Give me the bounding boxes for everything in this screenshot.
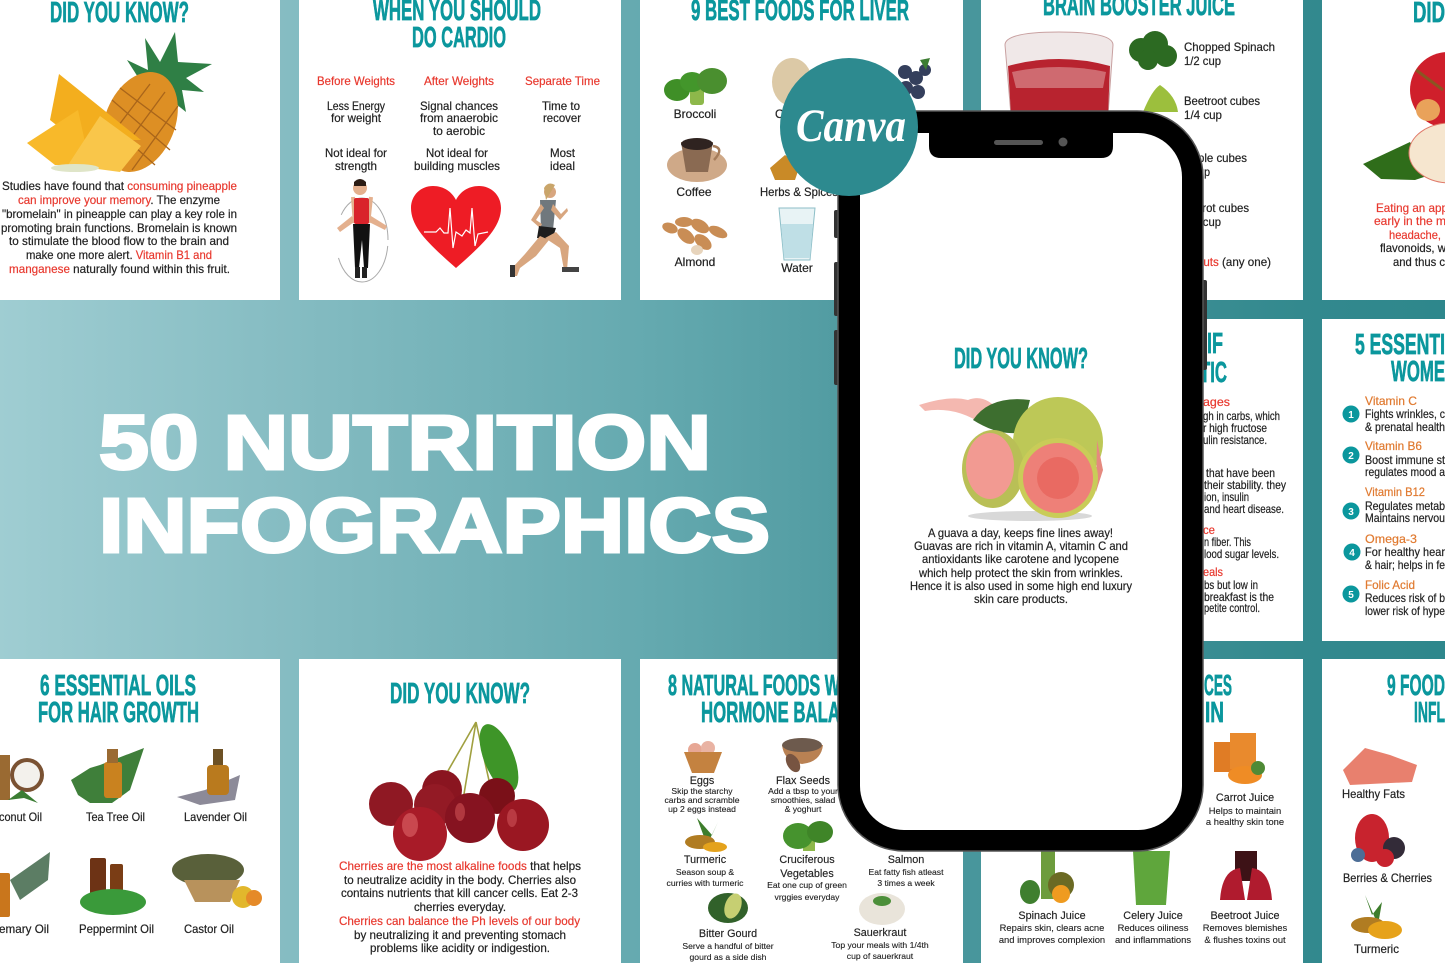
food: eggs: Skip the starchy [671,786,733,796]
text block: foods to avoid: bs but low in [1204,578,1258,592]
food: sauerkraut: Top your meals with 1/4th [831,940,929,950]
heading: 6 essential oils for hair growth: FOR HAIR GROWTH [38,697,199,729]
cardio comparison text: Signal chances [420,99,498,113]
text block: apple facts: early in the m [1374,214,1445,228]
juice: spinach: Repairs skin, clears acne [1000,922,1104,933]
food: salmon: Salmon [888,854,924,866]
heading: when you should do cardio [373,0,541,54]
text block: apple facts: headache, [1389,228,1441,242]
main title: 50 NUTRITION [99,400,711,486]
food: salmon: 3 times a week [877,878,935,888]
cardio comparison text: for weight [331,111,382,125]
cardio comparison text: Most [550,146,576,160]
screen text block: A guava a day, keeps fine lines away! [928,526,1113,540]
icon: tea tree oil [71,748,144,803]
column headings: After Weights [424,74,494,88]
juice: beetroot: Removes blemishes [1203,922,1288,933]
text block: cherries facts: cherries everyday. [414,900,506,914]
food: cruciferous vegetables: vrggies everyday [775,892,840,902]
text block: foods to avoid: gh in carbs, which [1203,409,1280,423]
text block: foods to avoid [1203,395,1286,615]
icon: lavender oil [177,749,240,805]
food: eggs: carbs and scramble [664,795,740,805]
juice: carrot: Carrot Juice [1216,792,1274,804]
food: salmon [868,854,944,888]
label: oils bottom row: emary Oil [0,922,49,936]
panel: when you should do cardio [299,0,621,300]
heading: 6 essential oils for hair growth [38,670,199,729]
food: almond: Almond [675,255,715,269]
number badges: 5 [1348,590,1354,601]
food: sauerkraut: Sauerkraut [854,927,906,939]
heading: juices for skin fragment: IN [1205,697,1224,729]
icon: heart with heartbeat [411,186,501,268]
food: bitter gourd: Serve a handful of bitter [682,941,774,951]
text block: foods to avoid: ion, insulin [1204,490,1249,504]
text block: cherries facts: by neutralizing it and preventing stomach [354,928,566,942]
panel: 9 best foods for liver [640,0,963,300]
text block: cherries facts: Cherries can balance the Ph levels of our body [339,914,580,928]
vitamin list: Omega-3 [1365,532,1417,546]
juice ingredients: 1 cup [1184,165,1210,179]
text block: pineapple facts: promoting brain functions. Bromelain is known [1,221,237,235]
juice: beetroot: Beetroot Juice [1210,910,1280,922]
phone side buttons [834,210,1207,385]
label: oils top row: Tea Tree Oil [86,810,145,824]
label: oils top row: Lavender Oil [184,810,247,824]
heading: did you know: DID YOU KNOW? [390,678,530,710]
juice: carrot: Helps to maintain [1209,805,1281,816]
food: turmeric: curries with turmeric [667,878,744,888]
juice ingredients: Apple cubes [1184,151,1247,165]
cardio comparison text: ideal [550,159,575,173]
food: cruciferous vegetables [767,821,847,902]
panel: apple did you know [1322,0,1445,300]
juice: spinach: Spinach Juice [1018,910,1086,922]
panel: 5 essential vitamins for women [1322,319,1445,641]
text block: foods to avoid: and heart disease. [1204,502,1284,516]
column headings [317,74,600,88]
text block: cherries facts [339,859,581,955]
food: eggs [664,741,740,814]
cardio comparison text: recover [543,111,581,125]
text block: pineapple facts [1,179,237,276]
food: eggs: up 2 eggs instead [668,804,736,814]
heading: 5 essential women [1355,329,1445,388]
text block: pineapple facts: to stimulate the blood flow to the brain and [9,234,229,248]
cardio comparison text: from anaerobic [420,111,498,125]
juice ingredients: Nuts (any one) [1195,255,1271,269]
food: turmeric: Season soup & [676,867,734,877]
cardio comparison text [325,99,581,173]
screen text block: which help protect the skin from wrinkles. [918,566,1123,580]
food: bitter gourd [682,891,774,962]
juice: celery: Celery Juice [1123,910,1183,922]
heading: 9 foods [1387,670,1445,729]
heading: intermittent fasting fragment [1200,328,1227,389]
phone speaker [994,140,1043,145]
heading: 8 natural foods hormone balance: 8 NATURAL FOODS W [668,670,840,702]
text block: foods to avoid: n fiber. This [1204,535,1251,549]
icon: rosemary oil [0,852,50,917]
juice: beetroot: & flushes toxins out [1204,934,1286,945]
food: cruciferous vegetables: Eat one cup of green [767,880,847,890]
label: oils bottom row [0,922,234,936]
cardio comparison text: to aerobic [433,124,485,138]
text block: foods to avoid: petite control. [1204,601,1260,615]
icon: woman with jump rope [336,179,388,282]
heading: 8 natural foods hormone balance [668,670,840,729]
food: bitter gourd: Bitter Gourd [699,928,757,940]
heading: juices for skin fragment [1204,670,1232,729]
juice: spinach: and improves complexion [999,934,1105,945]
icon: peppermint oil [80,858,146,915]
text block: foods to avoid: r high fructose [1203,421,1267,435]
icon: beetroot leaf [1143,85,1178,112]
food: flax seeds [768,738,838,814]
juice: carrot [1206,733,1284,827]
number badges: 3 [1348,507,1354,518]
text block: foods to avoid: eals [1203,565,1223,579]
food: broccoli [664,68,727,121]
juice: celery: and inflammations [1115,934,1191,945]
food: flax seeds: Add a tbsp to your [768,786,838,796]
food: healthy fats: Healthy Fats [1342,787,1405,801]
vitamin list: Folic Acid [1365,578,1415,592]
canva badge: Canva [796,100,906,152]
text block: pineapple facts: Studies have found that consuming pineapple [2,179,237,193]
panel: intermittent fasting foods [981,319,1303,641]
juice: spinach [999,851,1105,945]
food: turmeric: Turmeric [684,854,727,866]
text block: foods to avoid: ages [1203,395,1230,409]
panel: pineapple did you know [0,0,280,300]
heading: 6 essential oils for hair growth: 6 ESSENTIAL OILS [40,670,196,702]
juice ingredients: 1/4 cup [1184,108,1222,122]
number badges: 1 [1348,410,1354,421]
phone mockup [834,111,1207,851]
screen text block: antioxidants like carotene and lycopene [922,552,1119,566]
number badges: 2 [1348,451,1354,462]
food: water: Water [781,261,813,275]
food: cruciferous vegetables: Cruciferous [779,854,835,866]
text block: foods to avoid: ulin resistance. [1203,433,1267,447]
screen text block: Hence it is also used in some high end luxury [910,579,1132,593]
food: water [779,208,815,275]
icon: apple [1363,52,1445,183]
text block: foods to avoid: lood sugar levels. [1204,547,1279,561]
phone screen [860,133,1182,830]
food: bitter gourd: gourd as a side dish [690,952,767,962]
main title: INFOGRAPHICS [99,483,770,569]
juice ingredients: Chopped Spinach [1184,40,1275,54]
food: oats: Oats [775,107,800,121]
column headings: Separate Time [525,74,600,88]
juice ingredients: Beetroot cubes [1184,94,1260,108]
text block: cherries facts: contains nutrients that kill cancer cells. Eat 2-3 [341,886,578,900]
text block: foods to avoid: their stability. they [1204,478,1286,492]
food: sauerkraut [831,893,929,961]
food: herbs and spices: Herbs & Spices [760,185,838,199]
juice ingredients: Carrot cubes [1184,201,1249,215]
panel: 8 natural foods [640,659,963,963]
vitamin list [1365,394,1445,618]
cardio comparison text: Time to [542,99,580,113]
heading: 8 natural foods hormone balance: HORMONE BALA [701,697,840,729]
heading: intermittent fasting fragment: TIC [1200,357,1227,389]
main title [99,400,770,569]
juice: celery: Reduces oiliness [1118,922,1189,933]
screen heading: did you know: DID YOU KNOW? [954,343,1088,375]
food: flax seeds: smoothies, salad [771,795,835,805]
text block: pineapple facts: make one more alert. Vitamin B1 and [26,248,212,262]
label: oils bottom row: Peppermint Oil [79,922,154,936]
food: broccoli: Broccoli [674,107,716,121]
food: turmeric [1351,895,1402,956]
icon: spinach [1129,31,1177,70]
cardio comparison text: building muscles [414,159,500,173]
heading: when you should do cardio: DO CARDIO [412,22,506,54]
text block: pineapple facts: can improve your memory. The enzyme [18,193,220,207]
canva badge [780,58,918,196]
text block: cherries facts: problems like acidity or indigestion. [370,941,550,955]
food: blueberries [898,58,931,99]
food: healthy fats [1342,748,1417,801]
food: oats [772,58,812,121]
text block: pineapple facts: manganese naturally found within this fruit. [9,262,230,276]
screen text block: skin care products. [974,592,1068,606]
phone notch [929,133,1113,158]
icon: cherries [369,719,549,861]
food: turmeric [667,818,744,888]
food: salmon: Eat fatty fish atleast [868,867,944,877]
juice ingredients: 1/4 cup [1184,215,1221,229]
icon: castor oil [172,854,262,908]
juice: carrot: a healthy skin tone [1206,816,1284,827]
column headings: Before Weights [317,74,395,88]
vitamin list: Vitamin B6 [1365,439,1422,453]
icon: guava [919,397,1103,521]
food: cruciferous vegetables: Vegetables [780,868,834,880]
icon: coconut oil [0,755,44,803]
panel: brain booster juice [981,0,1303,300]
text block: cherries facts: to neutralize acidity in the body. Cherries also [344,873,576,887]
vitamin list: Vitamin B12 [1365,485,1425,499]
food: berries and cherries [1343,814,1432,885]
juice: beetroot [1203,851,1288,945]
icon: pineapple [27,32,212,183]
label: oils top row: conut Oil [0,810,42,824]
icon: juice glass [1005,32,1113,115]
number badges: 4 [1349,548,1355,559]
juice: celery [1115,851,1191,945]
cardio comparison text: Less Energy [327,99,385,113]
panel: juices for skin [981,659,1303,963]
food: coffee: Coffee [676,185,712,199]
cardio comparison text: Not ideal for [325,146,387,160]
label: oils bottom row: Castor Oil [184,922,234,936]
text block: apple facts [1374,201,1445,269]
number badges [1342,406,1360,602]
food: coffee [667,138,727,199]
food: flax seeds: Flax Seeds [776,775,831,787]
phone body [838,111,1203,851]
vitamin list: Vitamin C [1365,394,1417,408]
panel: juices for skin: CES [1204,670,1232,702]
cardio comparison text: Not ideal for [426,146,488,160]
food: almond [661,216,729,269]
screen text block [910,526,1132,606]
cardio comparison text: strength [335,159,377,173]
label: oils top row [0,810,247,824]
icon: runner [510,184,579,277]
food: herbs and spices [760,155,838,199]
food: flax seeds: & yoghurt [785,804,822,814]
heading: intermittent fasting fragment: IF [1207,328,1223,360]
food: berries and cherries: Berries & Cherries [1343,871,1432,885]
text block: foods to avoid: ce [1203,523,1215,537]
text block: foods to avoid: that have been [1206,466,1275,480]
food: turmeric: Turmeric [1354,942,1399,956]
text block: cherries facts: Cherries are the most alkaline foods that helps [339,859,581,873]
panel: 6 essential oils [0,659,280,963]
food: eggs: Eggs [690,775,715,787]
panel: cherries did you know [299,659,621,963]
phone camera [1058,138,1068,146]
text block: foods to avoid: breakfast is the [1204,590,1274,604]
screen text block: Guavas are rich in vitamin A, vitamin C and [914,539,1128,553]
food: sauerkraut: cup of sauerkraut [847,951,914,961]
juice ingredients [1184,40,1275,269]
panel: 9 foods inflammation [1322,659,1445,963]
juice ingredients: 1/2 cup [1184,54,1221,68]
text block: pineapple facts: "bromelain" in pineapple can play a key role in [2,207,237,221]
